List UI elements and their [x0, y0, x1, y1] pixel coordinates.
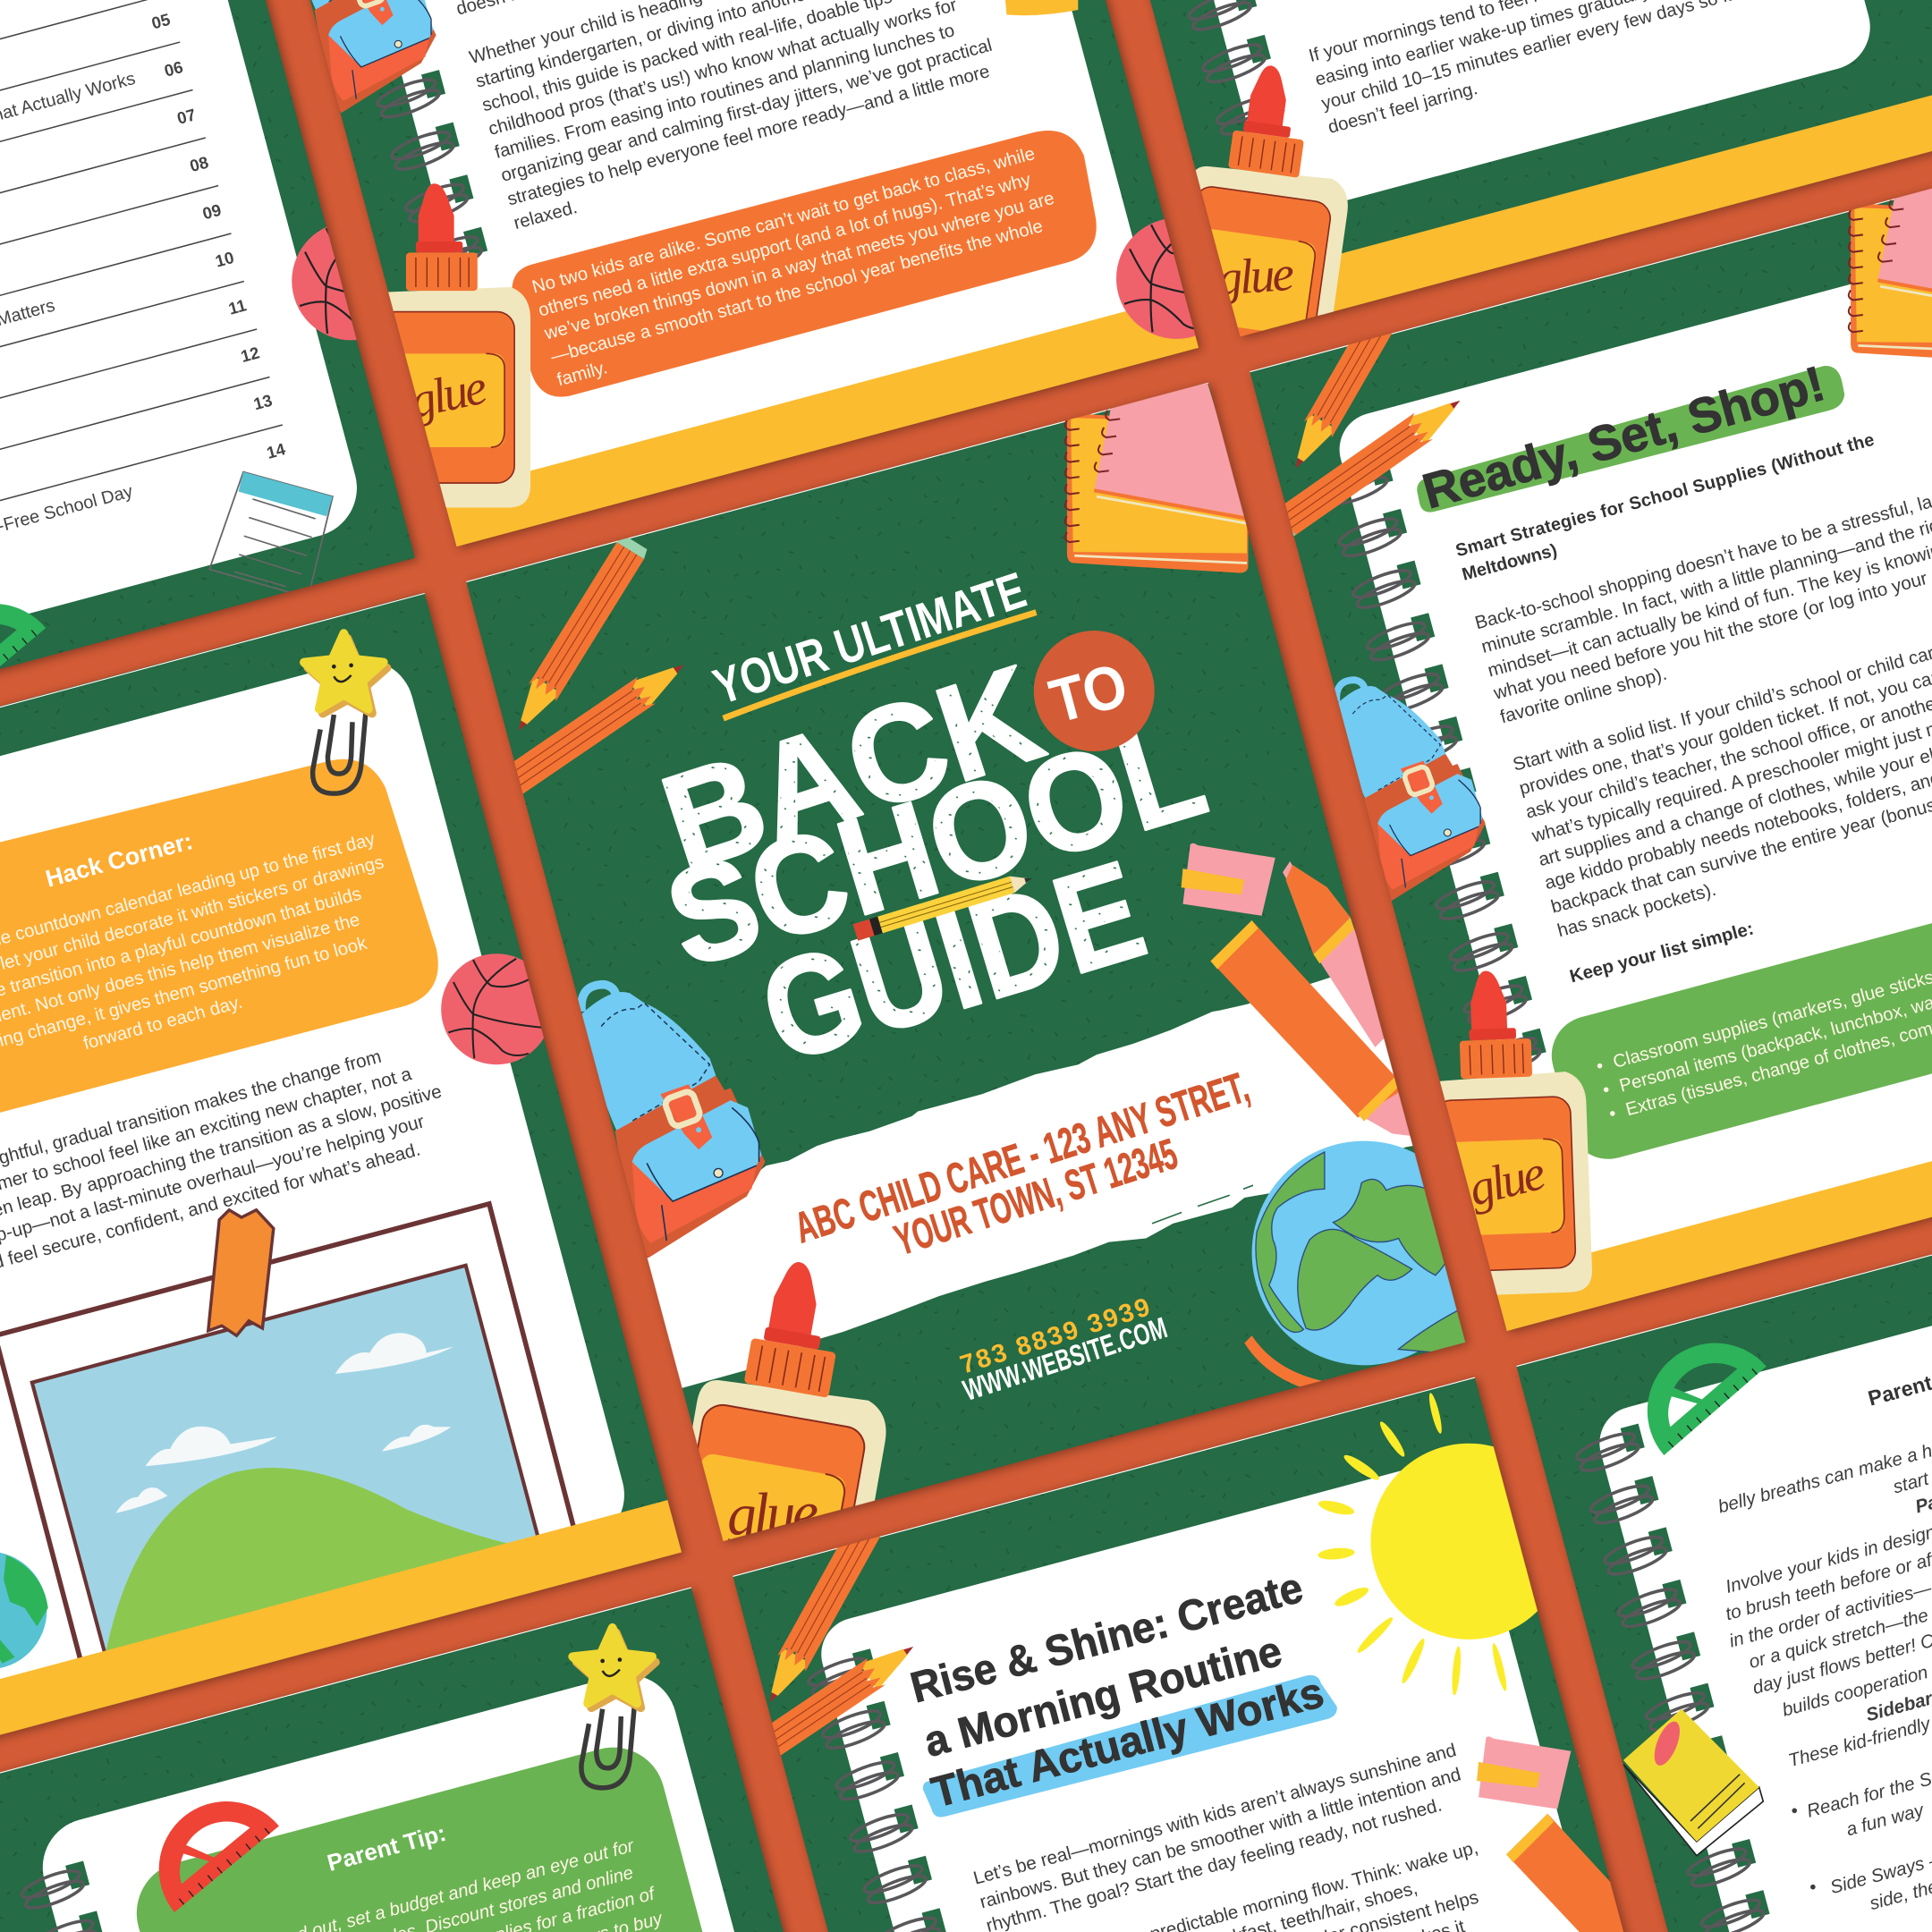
- icon: pencil: [756, 1501, 892, 1710]
- morning tip text: doesn’t feel jarring.: [1326, 79, 1479, 138]
- morning text: rainbows. But they can be smoother with a little intention and: [978, 1764, 1463, 1912]
- heading: rise and shine: [906, 1563, 1337, 1818]
- icon: red protractor: [131, 1774, 279, 1912]
- callout: no two kids: —because a smooth start to the school year benefits the whole: [549, 216, 1045, 367]
- yellow footer strip: [1493, 1080, 1932, 1331]
- parent tip callout: [125, 1736, 777, 1932]
- panel: ready set shop page: [1250, 138, 1932, 1331]
- intro text: families. From easing into routines and planning lunches to: [493, 21, 957, 163]
- icon: green protractor: [1620, 1315, 1767, 1455]
- contact text: 783 8839 3939: [957, 1292, 1153, 1380]
- callout: no two kids: others need a little extra support (and a lot of hugs). That’s why: [537, 170, 1034, 321]
- icon: pencil: [1282, 268, 1420, 476]
- callout: no two kids: family.: [555, 358, 610, 390]
- subheading: Meltdowns): [1460, 540, 1559, 585]
- icon: small pencil: [853, 870, 1035, 941]
- address text: [789, 1063, 1255, 1265]
- panel: cover page: [466, 383, 1479, 1665]
- icon: pencil: [505, 534, 649, 739]
- hack corner callout: [0, 736, 448, 1153]
- icon: globe: [1244, 1141, 1476, 1399]
- icon: notebook: [1065, 383, 1248, 573]
- green supply list: •: [1607, 1104, 1618, 1124]
- intro text: strategies to help everyone feel more ready—and a little more: [505, 62, 992, 209]
- parent tip callout: Parent Tip:: [325, 1819, 449, 1877]
- yellow footer strip: [443, 295, 1199, 547]
- contents rules and page numbers: 06: [162, 57, 185, 80]
- icon: basketball: [441, 953, 552, 1064]
- icon: backpack: [311, 0, 436, 113]
- paragraph: has snack pockets).: [1555, 879, 1718, 941]
- icon: notepad: [209, 472, 333, 597]
- contact text: [957, 1292, 1171, 1408]
- subheading: Smart Strategies for School Supplies (Without the: [1453, 430, 1877, 561]
- icon: backpack: [581, 985, 765, 1258]
- green supply list: [1543, 824, 1932, 1168]
- paragraph: [1472, 486, 1932, 728]
- paragraph: provides one, that’s your golden ticket. If not, you can: [1517, 666, 1932, 799]
- callout: no two kids: we’ve broken things down in a way that meets you where you are: [542, 189, 1056, 344]
- icon: glue bottle: glue: [725, 1479, 819, 1548]
- page text: or a quick stretch—the: [1747, 1605, 1930, 1673]
- green supply list: •: [1601, 1080, 1612, 1101]
- icon: yellow book: [1623, 1709, 1763, 1856]
- title: back to school guide: BACK: [646, 637, 1058, 901]
- page text: These kid-friendly: [1786, 1713, 1932, 1771]
- contents rules and page numbers: 10: [213, 248, 236, 271]
- page text: [1716, 1353, 1932, 1914]
- icon: notebook: [1849, 174, 1932, 363]
- panel: table of contents page: [0, 0, 415, 669]
- icon: green protractor: [0, 604, 46, 666]
- heading: rise and shine: Rise & Shine: Create: [906, 1563, 1308, 1712]
- title: back to school guide: GUIDE: [745, 831, 1160, 1091]
- contents rules and page numbers: 07: [175, 105, 198, 128]
- morning text: Let’s be real—mornings with kids aren’t always sunshine and: [971, 1740, 1458, 1889]
- address text: YOUR TOWN, ST 12345: [889, 1130, 1183, 1265]
- page text: a fun way: [1844, 1800, 1928, 1840]
- icon: glue bottle: glue: [1463, 1145, 1551, 1216]
- title: back to school guide: SCHOOL: [651, 692, 1221, 996]
- icon: backpack: [1336, 680, 1486, 902]
- contents rules and page numbers: 05: [149, 10, 172, 32]
- title: your ultimate: YOUR ULTIMATE: [707, 561, 1032, 715]
- intro text: [454, 0, 1007, 233]
- panel: stretch and sidebar page: [1516, 1147, 1932, 1932]
- page text: in the order of activities—: [1727, 1578, 1932, 1652]
- picture illustration: [0, 1204, 575, 1682]
- icon: markers and eraser: [1477, 1736, 1707, 1932]
- icon: glue bottle: glue: [405, 359, 492, 428]
- icon: sun: [1317, 1392, 1567, 1696]
- icon: pencil: [1269, 387, 1470, 541]
- contents rules and page numbers: 11: [226, 295, 249, 318]
- white brush band: [616, 936, 1479, 1417]
- icon: pencil: [491, 652, 692, 803]
- hack corner callout: Hack Corner:: [43, 827, 196, 893]
- paragraph: favorite online shop).: [1498, 664, 1669, 727]
- icon: marker end: [1004, 0, 1078, 15]
- contents rules and page numbers: 12: [239, 343, 261, 366]
- icon: glue bottle: [1421, 968, 1593, 1297]
- contents rules and page numbers: 09: [200, 200, 224, 223]
- to badge: TO: [1043, 650, 1134, 736]
- title: your ultimate: [707, 561, 1037, 718]
- icon: pencil: [721, 1633, 922, 1784]
- callout: no two kids: [504, 119, 1110, 404]
- icon: globe: [0, 1551, 48, 1670]
- icon: markers and eraser: [1182, 843, 1412, 1136]
- green supply list: •: [1594, 1056, 1606, 1077]
- contents rules and page numbers: 13: [251, 391, 275, 413]
- callout: no two kids: No two kids are alike. Some can’t wait to get back to class, while: [530, 144, 1038, 298]
- contents rules and page numbers: [0, 0, 286, 530]
- yellow footer strip: [1226, 85, 1932, 336]
- list label: Keep your list simple:: [1568, 919, 1756, 987]
- icon: star paperclip: [572, 1628, 656, 1788]
- paragraph: [1510, 628, 1932, 942]
- page text: •: [1789, 1801, 1801, 1822]
- address text: ABC CHILD CARE - 123 ANY STRET,: [789, 1063, 1255, 1252]
- contact text: WWW.WEBSITE.COM: [960, 1311, 1171, 1408]
- heading: ready set shop: Ready, Set, Shop!: [1417, 355, 1831, 519]
- icon: glue bottle: glue: [1216, 246, 1296, 306]
- icon: basketball: [292, 227, 357, 340]
- closing paragraph: [0, 1033, 457, 1280]
- hack corner callout: forward to each day.: [81, 993, 244, 1054]
- heading: rise and shine: That Actually Works: [927, 1668, 1328, 1818]
- page text: builds cooperation: [1780, 1662, 1930, 1721]
- yellow footer strip: [0, 1500, 682, 1751]
- page text: •: [1807, 1877, 1818, 1898]
- contents rules and page numbers: 14: [265, 439, 288, 462]
- icon: basketball: [1116, 218, 1237, 339]
- panel: parent tip page: [0, 1587, 948, 1932]
- icon: star paperclip: [304, 633, 387, 793]
- icon: glue bottle: [1163, 56, 1366, 400]
- brush band streaks: [1152, 1185, 1253, 1224]
- icon: glue bottle: [657, 1249, 913, 1665]
- title: back to school guide: [646, 631, 1221, 1091]
- panel: introduction page: [309, 0, 1199, 547]
- intro text: organizing gear and calming first-day jitters, we’ve got practical: [499, 36, 995, 186]
- panel: hack corner page: [0, 592, 682, 1751]
- panel: morning tips page: [983, 0, 1932, 400]
- paragraph: what you need before you hit the store (or log into your: [1491, 568, 1929, 704]
- contents rules and page numbers: 08: [188, 153, 210, 175]
- heading: rise and shine: a Morning Routine: [919, 1627, 1287, 1767]
- panel: morning routine page: [721, 1377, 1732, 1932]
- to badge: [1034, 631, 1155, 751]
- page text: start: [1891, 1468, 1932, 1497]
- intro text: relaxed.: [512, 198, 580, 233]
- icon: glue bottle: [370, 183, 530, 508]
